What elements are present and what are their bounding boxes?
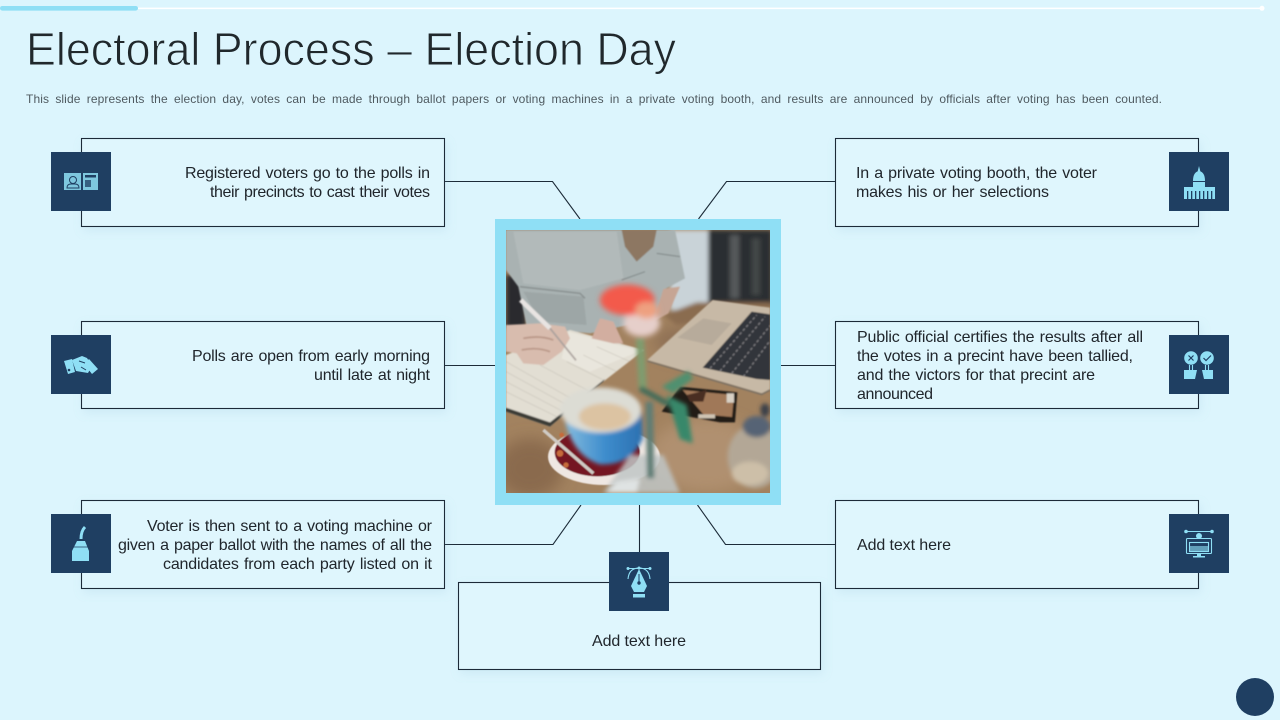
panel text: certifies results bbox=[857, 329, 1143, 403]
panel text: polls open: Polls are open from early morning bbox=[192, 348, 430, 365]
panel: registered voters bbox=[82, 138, 444, 226]
navigation circle bbox=[1236, 678, 1274, 716]
panel: voting machine bbox=[82, 500, 444, 588]
panel text: registered voters: their precincts to cast their votes bbox=[210, 184, 430, 201]
vase bbox=[603, 455, 680, 493]
title: Electoral Process – Election Day bbox=[26, 23, 676, 75]
panel text: certifies results: and the victors for that precint are bbox=[857, 367, 1095, 384]
glass jar bbox=[728, 425, 782, 488]
photo: person writing at a table bbox=[497, 230, 782, 498]
icon: voter ID card bbox=[51, 152, 111, 211]
subtitle: This slide represents the election day, votes can be made through ballot papers or voting machines in a private voting booth, and results are announced by officials after voting has been counted. bbox=[26, 92, 1162, 106]
connector lines bbox=[444, 182, 835, 552]
panel: polls open bbox=[82, 322, 444, 408]
panel text: voting machine bbox=[118, 518, 433, 573]
panel text: certifies results: Public official certifies the results after all bbox=[857, 329, 1143, 346]
icon: ballot box bbox=[51, 514, 111, 573]
panel text: certifies results: the votes in a precint have been tallied, bbox=[857, 348, 1133, 365]
panel text: private booth bbox=[856, 165, 1098, 201]
pen bbox=[521, 300, 550, 328]
panel text: voting machine: candidates from each party listed on it bbox=[163, 556, 433, 573]
panel text: polls open: until late at night bbox=[314, 367, 431, 384]
panel text: registered voters: Registered voters go to the polls in bbox=[185, 165, 430, 182]
panel: certifies results bbox=[836, 322, 1198, 408]
laptop bbox=[647, 300, 770, 393]
panel text: private booth: In a private voting booth, the voter bbox=[856, 165, 1098, 182]
flower bbox=[600, 285, 660, 337]
saucer bbox=[543, 428, 660, 485]
icon: design monitor bbox=[1169, 514, 1229, 573]
icon: capitol building bbox=[1169, 152, 1229, 211]
panel text: voting machine: given a paper ballot with the names of all the bbox=[118, 537, 432, 554]
shirt bbox=[506, 230, 685, 333]
panel text: private booth: makes his or her selections bbox=[856, 184, 1049, 201]
icon: handshake bbox=[51, 335, 111, 394]
panel text: add text right: Add text here bbox=[857, 537, 951, 554]
photo frame bbox=[495, 219, 781, 505]
cup bbox=[562, 412, 646, 468]
panel: add text bottom bbox=[458, 582, 820, 670]
panel: private booth bbox=[836, 138, 1198, 226]
icon: pen tool bbox=[609, 552, 669, 611]
icon: yes and no votes bbox=[1169, 335, 1229, 394]
panel text: registered voters bbox=[185, 165, 430, 201]
top progress bar bbox=[0, 6, 1264, 11]
notebook bbox=[506, 330, 644, 427]
hands bbox=[506, 323, 570, 365]
panel text: add text bottom: Add text here bbox=[592, 633, 686, 650]
panel: add text right bbox=[836, 500, 1198, 588]
central photo bbox=[495, 219, 782, 505]
phone bbox=[662, 387, 737, 422]
panel text: certifies results: announced bbox=[857, 386, 933, 403]
panel text: voting machine: Voter is then sent to a voting machine or bbox=[147, 518, 433, 535]
stem and leaves bbox=[640, 338, 643, 388]
panel text: polls open bbox=[192, 348, 431, 384]
